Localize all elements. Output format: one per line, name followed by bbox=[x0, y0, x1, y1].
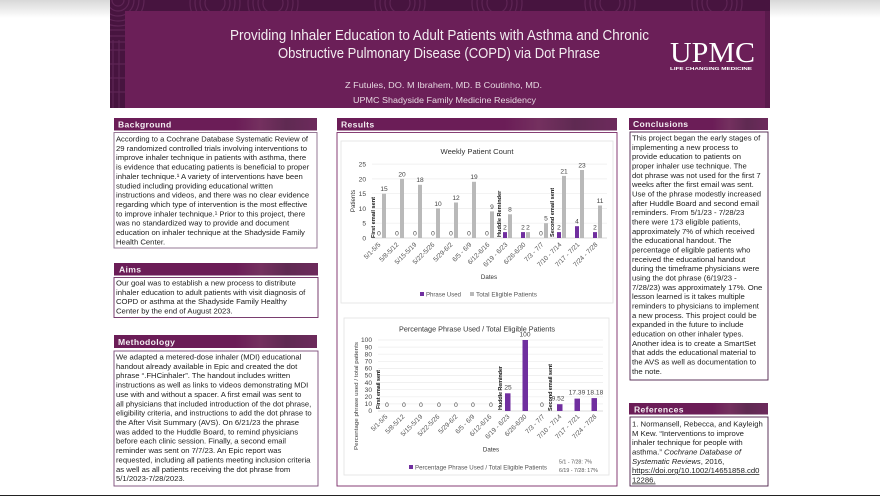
bar chart: percentage phrase used bbox=[344, 318, 609, 475]
text block: conclusions: This project began the early stages of bbox=[632, 134, 761, 142]
x axis dates: 5/29-6/2 bbox=[432, 241, 455, 264]
bar chart: weekly patient count: 0 bbox=[539, 230, 543, 238]
annotation: email and huddle markers: Second email sent bbox=[550, 188, 556, 237]
x axis dates: 5/1-5/5 bbox=[370, 413, 390, 433]
heading: references: References bbox=[634, 404, 684, 414]
bar chart: weekly patient count: 8 bbox=[508, 207, 512, 214]
text block: conclusions: the educational handout. The bbox=[632, 236, 731, 245]
bar chart: percentage phrase used: 9.52 bbox=[552, 396, 565, 402]
x axis dates: 5/22-5/26 bbox=[417, 413, 442, 438]
text block: references bbox=[632, 420, 763, 484]
text block: methodology: We adapted a metered-dose inhaler (MDI) educational bbox=[116, 352, 302, 362]
x axis dates bbox=[363, 241, 600, 269]
text block: conclusions: a new process. This project could be bbox=[632, 311, 757, 320]
bar chart: percentage phrase used: Dates bbox=[483, 446, 499, 454]
text block: conclusions: education on other inhaler types. bbox=[632, 329, 744, 338]
text block: conclusions: the AVS as well as documentation to bbox=[632, 357, 756, 366]
text block: methodology: as well as all patients receiving the dot phrase from bbox=[116, 465, 290, 474]
annotation: email and huddle markers: Huddle Reminder bbox=[498, 365, 504, 410]
text block: conclusions: approximately 7% of which received bbox=[632, 227, 755, 236]
bar chart: weekly patient count: 21 bbox=[560, 168, 568, 175]
bar chart: weekly patient count: 18 bbox=[416, 177, 424, 184]
x axis dates: 5/22-5/26 bbox=[412, 241, 437, 266]
text block: background: improve inhaler technique in patients with asthma, there bbox=[116, 153, 306, 162]
text block: conclusions: Use of the phrase modestly increased bbox=[632, 190, 761, 198]
callout: overall percentages: 6/19 - 7/28: 17% bbox=[559, 468, 598, 474]
bar chart: percentage phrase used: 0 bbox=[489, 402, 493, 409]
header banner bbox=[92, 0, 770, 108]
text block: methodology: the After Visit Summary (AVS). On 6/21/23 the phrase bbox=[116, 418, 299, 427]
bar chart: weekly patient count: 5 bbox=[544, 216, 548, 223]
bar chart: weekly patient count: Patients bbox=[350, 190, 357, 212]
heading: aims: Aims bbox=[119, 264, 141, 274]
text block: background: According to a Cochrane Database Systematic Review of bbox=[116, 134, 309, 144]
text block: references: 1. Normansell, Rebecca, and Kayleigh bbox=[632, 420, 763, 428]
chart title: Percentage Phrase Used / Total Eligible Patients bbox=[399, 326, 556, 334]
UPMC logo: LIFE CHANGING MEDICINE bbox=[670, 66, 753, 72]
text block: background: instructions and videos, and there was no clear evidence bbox=[116, 191, 309, 200]
text block: background: regarding which type of intervention is the most effective bbox=[116, 200, 307, 209]
annotation: email and huddle markers: Huddle Reminder bbox=[497, 190, 503, 237]
annotation: email and huddle markers bbox=[376, 364, 554, 411]
annotation: email and huddle markers: First email sent bbox=[371, 197, 377, 238]
bar chart: weekly patient count: 19 bbox=[470, 174, 478, 181]
x axis dates: 7/17 - 7/21 bbox=[554, 413, 582, 441]
bar chart: weekly patient count: 2 bbox=[557, 224, 561, 232]
bar chart: weekly patient count: 12 bbox=[452, 195, 460, 202]
bar chart: percentage phrase used: 25 bbox=[504, 384, 512, 392]
callout: overall percentages bbox=[559, 460, 598, 474]
bar chart: weekly patient count: 10 bbox=[434, 201, 442, 208]
text block: background: is evidence that educating patients is beneficial to proper bbox=[116, 163, 310, 172]
text block: methodology: eligibility criteria, and instructions to add the dot phrase to bbox=[116, 409, 312, 418]
bar chart: weekly patient count: 10 bbox=[359, 206, 366, 213]
panel: methodology bbox=[114, 335, 318, 486]
bar chart: percentage phrase used: 20 bbox=[365, 394, 372, 401]
bar chart: weekly patient count: 0 bbox=[485, 230, 489, 238]
x axis dates: 6/12-6/16 bbox=[467, 241, 492, 266]
heading: methodology: Methodology bbox=[118, 337, 175, 347]
text block: methodology: 5/1/2023-7/28/2023. bbox=[116, 474, 185, 483]
bar chart: percentage phrase used: 0 bbox=[385, 402, 389, 409]
annotation: email and huddle markers bbox=[371, 188, 556, 238]
bar chart: percentage phrase used: 0 bbox=[454, 402, 458, 409]
text block: background: 29 randomized controlled trials involving interventions to bbox=[116, 144, 307, 153]
x axis dates: 7/17 - 7/21 bbox=[554, 241, 582, 269]
title: Obstructive Pulmonary Disease (COPD) via Dot Phrase bbox=[278, 45, 600, 62]
bar chart: percentage phrase used: 90 bbox=[365, 344, 372, 351]
x axis dates: 6/12-6/16 bbox=[469, 413, 494, 438]
UPMC logo: UPMC bbox=[670, 38, 755, 69]
text block: conclusions: weeks after the first email was sent. bbox=[631, 180, 754, 189]
text block: conclusions: using the dot phrase (6/19/23 - bbox=[632, 274, 737, 282]
text block: conclusions: proper inhaler use technique. The bbox=[632, 162, 747, 170]
bar chart: weekly patient count: 0 bbox=[362, 235, 366, 242]
authors and affiliation bbox=[345, 80, 542, 105]
bar chart: percentage phrase used: 18.18 bbox=[587, 390, 604, 396]
text block: references: M Kew. “Interventions to improve bbox=[632, 429, 744, 438]
text block: references: inhaler technique for people with bbox=[632, 438, 743, 447]
authors and affiliation: UPMC Shadyside Family Medicine Residency bbox=[353, 95, 537, 105]
callout: overall percentages: 5/1 - 7/28: 7% bbox=[559, 460, 592, 466]
bar chart: percentage phrase used: 70 bbox=[365, 358, 372, 366]
bar chart: percentage phrase used: 100 bbox=[361, 337, 372, 344]
annotation: email and huddle markers: Second email sent bbox=[548, 364, 554, 411]
bar chart: weekly patient count: 0 bbox=[431, 230, 435, 238]
heading: aims bbox=[114, 263, 318, 276]
heading: methodology bbox=[114, 335, 317, 348]
panel: background bbox=[114, 118, 317, 248]
text block: conclusions: expanded in the future to include bbox=[632, 320, 744, 329]
x axis dates: 5/1-5/5 bbox=[363, 241, 383, 261]
text block: conclusions: reminders to physicians to implement bbox=[632, 301, 760, 310]
text block: conclusions: provide education to patients on bbox=[632, 152, 741, 161]
bar chart: weekly patient count: Dates bbox=[481, 274, 497, 281]
bar chart: weekly patient count: 4 bbox=[575, 219, 579, 226]
heading: conclusions bbox=[629, 118, 768, 130]
bar chart: percentage phrase used: 0 bbox=[368, 408, 372, 415]
text block: background: inhaler technique.¹ A variety of interventions have been bbox=[116, 172, 303, 181]
x axis dates: 5/15-5/19 bbox=[400, 413, 425, 438]
bar chart: weekly patient count bbox=[341, 141, 613, 303]
text block: conclusions: 7/28/23) was approximately 17%. One bbox=[632, 283, 762, 292]
text block: methodology: reminder was sent on 7/7/23. An Epic report was bbox=[116, 446, 282, 455]
text block: references: asthma.” Cochrane Database of bbox=[632, 448, 742, 456]
text block: conclusions: Another idea is to create a SmartSet bbox=[632, 339, 757, 348]
text block: methodology: all physicians that included introduction of the dot phrase, bbox=[116, 399, 311, 408]
x axis dates: 7/3 - 7/7 bbox=[523, 241, 546, 264]
x axis dates: 6/5 - 6/9 bbox=[454, 413, 477, 436]
bar chart: weekly patient count: 15 bbox=[359, 191, 366, 198]
x axis dates: 5/8-5/12 bbox=[384, 413, 407, 436]
text block: conclusions: during the timeframe physicians were bbox=[632, 264, 759, 273]
bar chart: percentage phrase used: 17.39 bbox=[569, 390, 586, 396]
x axis dates: 5/8-5/12 bbox=[378, 241, 401, 264]
x axis dates: 7/10 - 7/14 bbox=[536, 241, 564, 269]
x axis dates: 7/24 - 7/28 bbox=[572, 241, 600, 269]
bar chart: weekly patient count: 0 bbox=[413, 230, 417, 238]
bar chart: percentage phrase used: 50 bbox=[365, 373, 372, 380]
heading: background bbox=[114, 118, 317, 130]
x axis dates: 7/24 - 7/28 bbox=[571, 413, 599, 441]
text block: conclusions: implementing a new process to bbox=[632, 143, 738, 152]
x axis dates: 7/10 - 7/14 bbox=[536, 413, 564, 441]
bar chart: percentage phrase used: 80 bbox=[365, 351, 372, 358]
title bbox=[230, 27, 649, 62]
annotation: email and huddle markers: First email sent bbox=[376, 370, 382, 409]
text block: references: https://doi.org/10.1002/14651858.cd0 bbox=[632, 466, 759, 475]
legend bbox=[420, 292, 538, 298]
bar chart: weekly patient count: 2 bbox=[526, 224, 530, 232]
text block: background bbox=[115, 134, 310, 246]
bar chart: percentage phrase used: 40 bbox=[365, 380, 372, 387]
text block: methodology: handout already available in Epic and created the dot bbox=[116, 362, 298, 371]
text block: aims: COPD or asthma at the Shadyside Family Healthy bbox=[116, 297, 287, 306]
bar chart: weekly patient count: 9 bbox=[490, 204, 494, 211]
text block: references: 12286. bbox=[632, 476, 656, 484]
text block: conclusions: dot phrase was not used for the first 7 bbox=[632, 171, 761, 180]
bar chart: percentage phrase used: 60 bbox=[365, 366, 372, 373]
bar chart: percentage phrase used: 0 bbox=[402, 402, 406, 409]
text block: aims: Our goal was to establish a new process to distribute bbox=[116, 278, 296, 288]
panel: references bbox=[629, 403, 768, 486]
text block: aims bbox=[116, 278, 306, 316]
x axis dates: 6/26-6/30 bbox=[504, 413, 529, 438]
panel: results bbox=[337, 118, 617, 486]
bar chart: weekly patient count: 2 bbox=[521, 224, 525, 232]
x axis dates: 5/15-5/19 bbox=[394, 241, 419, 266]
bar chart: weekly patient count: 0 bbox=[395, 230, 399, 238]
heading: background: Background bbox=[118, 120, 172, 130]
x axis dates: 6/19 - 6/23 bbox=[484, 413, 512, 441]
text block: background: studied including providing educational written bbox=[116, 181, 273, 190]
text block: methodology: requested, including all patients meeting inclusion criteria bbox=[116, 456, 311, 464]
text block: references: Systematic Reviews, 2016, bbox=[632, 457, 724, 466]
bar chart: percentage phrase used: 0 bbox=[437, 402, 441, 409]
x axis dates: 6/5 - 6/9 bbox=[451, 241, 474, 264]
text block: methodology: instructions as well as links to videos demonstrating MDI bbox=[116, 381, 308, 390]
heading: conclusions: Conclusions bbox=[633, 119, 688, 129]
x axis dates: 6/26-6/30 bbox=[503, 241, 528, 266]
legend: Percentage Phrase Used / Total Eligible Patients bbox=[415, 464, 548, 472]
x axis dates bbox=[370, 413, 599, 441]
bar chart: weekly patient count: 2 bbox=[503, 224, 507, 232]
bar chart: percentage phrase used: Percentage phrase used / total patients bbox=[354, 342, 360, 450]
text block: conclusions: lesson learned is it takes multiple bbox=[632, 292, 745, 301]
text block: conclusions: reminders. From 5/1/23 - 7/28/23 bbox=[632, 208, 744, 217]
chart title: Weekly Patient Count bbox=[441, 147, 514, 156]
heading: results: Results bbox=[341, 120, 374, 130]
text block: background: Health Center. bbox=[116, 238, 165, 246]
x axis dates: 6/19 - 6/23 bbox=[482, 241, 510, 269]
bar chart: percentage phrase used: 0 bbox=[540, 402, 544, 409]
bar chart: percentage phrase used: 30 bbox=[365, 387, 372, 394]
legend: Phrase Used bbox=[426, 292, 461, 298]
x axis dates: 5/29-6/2 bbox=[437, 413, 460, 436]
bar chart: weekly patient count: 5 bbox=[362, 221, 366, 228]
bar chart: weekly patient count: 20 bbox=[398, 171, 406, 178]
bar chart: percentage phrase used: 100 bbox=[519, 332, 531, 338]
text block: methodology: was added to the Huddle Board, to remind physicians bbox=[115, 427, 298, 436]
bar chart: percentage phrase used: 0 bbox=[419, 402, 423, 409]
bar chart: weekly patient count: 20 bbox=[359, 176, 366, 183]
text block: conclusions: received the educational handout bbox=[632, 255, 746, 264]
authors and affiliation: Z Futules, DO. M Ibrahem, MD. B Coutinho, MD. bbox=[345, 80, 542, 90]
heading: results bbox=[337, 118, 617, 130]
title: Providing Inhaler Education to Adult Patients with Asthma and Chronic bbox=[230, 27, 649, 44]
text block: background: to improve inhaler technique.¹ Prior to this project, there bbox=[116, 209, 305, 218]
text block: background: was no standardized way to provide and document bbox=[115, 219, 290, 228]
bar chart: weekly patient count: 15 bbox=[380, 186, 388, 193]
text block: conclusions: after Huddle Board and second email bbox=[632, 199, 759, 208]
bar chart: weekly patient count: 0 bbox=[467, 230, 471, 238]
bar chart: weekly patient count: 25 bbox=[359, 162, 366, 168]
panel: aims bbox=[114, 263, 318, 318]
bar chart: weekly patient count: 23 bbox=[578, 162, 586, 169]
text block: conclusions bbox=[631, 134, 762, 376]
text block: conclusions: the note. bbox=[632, 367, 662, 376]
legend: Total Eligible Patients bbox=[476, 292, 538, 298]
text block: aims: Center by the end of August 2023. bbox=[116, 307, 233, 316]
text block: conclusions: that adds the educational material to bbox=[632, 348, 756, 357]
x axis dates: 7/3 - 7/7 bbox=[524, 413, 547, 436]
bar chart: weekly patient count: 11 bbox=[597, 198, 604, 205]
bar chart: percentage phrase used: 10 bbox=[365, 401, 372, 408]
text block: background: education on inhaler technique at the Shadyside Family bbox=[116, 228, 305, 237]
bar chart: weekly patient count: 2 bbox=[593, 224, 597, 232]
bar chart: weekly patient count: 0 bbox=[449, 230, 453, 238]
bar chart: weekly patient count: 0 bbox=[377, 230, 381, 238]
text block: methodology: phrase “.FHCinhaler”. The handout includes written bbox=[116, 371, 290, 380]
bar chart: percentage phrase used: 0 bbox=[471, 402, 475, 409]
text block: conclusions: percentage of eligible patients who bbox=[632, 246, 750, 254]
text block: conclusions: there were 173 eligible patients, bbox=[632, 218, 741, 226]
text block: methodology: use with and without a spacer. A first email was sent to bbox=[116, 390, 301, 399]
text block: aims: inhaler education to adult patients with visit diagnosis of bbox=[116, 288, 306, 297]
panel: conclusions bbox=[629, 118, 768, 380]
text block: methodology bbox=[115, 352, 312, 483]
text block: methodology: before each clinic session. Finally, a second email bbox=[116, 437, 286, 446]
